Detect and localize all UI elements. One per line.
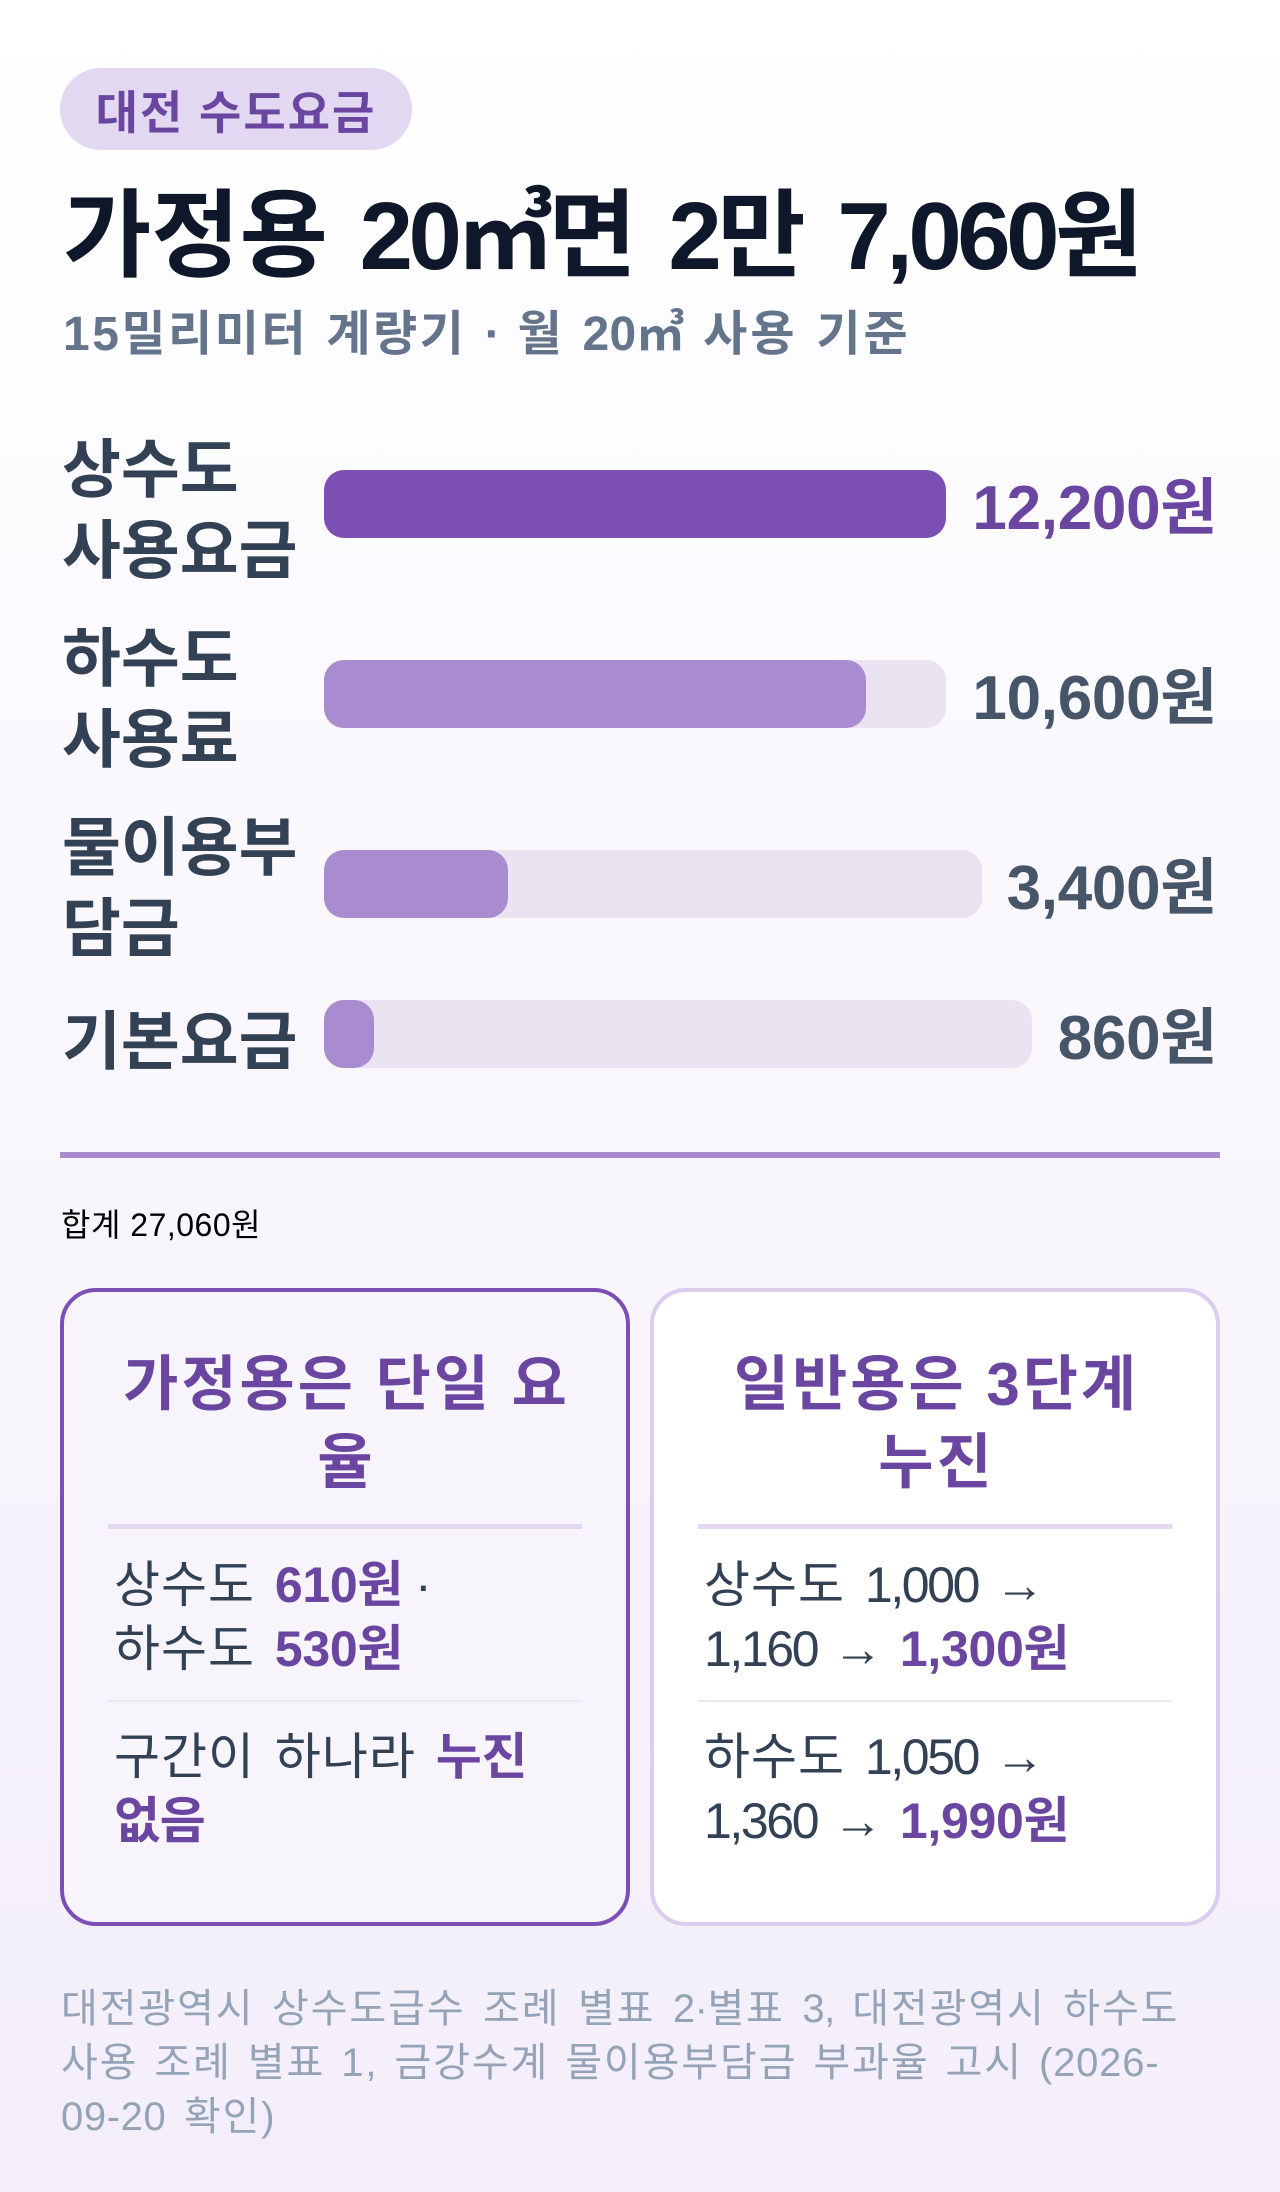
label: 담금 xyxy=(62,893,180,965)
text: sewage tiers: 1,360 → 1,990원 xyxy=(704,1793,1069,1849)
text: no progressive xyxy=(114,1729,527,1849)
text: water tiers: 상수도 1,000 → xyxy=(704,1557,1046,1613)
label: 사용료 xyxy=(62,704,239,776)
title: 가정용 20㎥면 2만 7,060원 xyxy=(63,183,1143,290)
card: household single rate xyxy=(60,1288,630,1926)
source note: 대전광역시 상수도급수 조례 별표 2·별표 3, 대전광역시 하수도 xyxy=(61,1987,1179,2031)
text: rates: 하수도 530원 xyxy=(114,1621,403,1677)
text: sewage tiers: 하수도 1,050 → xyxy=(704,1729,1046,1785)
bar: 860 xyxy=(324,1000,1032,1068)
label xyxy=(62,812,298,965)
source note: 사용 조례 별표 1, 금강수계 물이용부담금 부과율 고시 (2026- xyxy=(61,2041,1159,2085)
label: 기본요금 xyxy=(62,1006,298,1078)
bar: 3,400 xyxy=(324,850,982,918)
card heading xyxy=(734,1351,1139,1496)
row: water use charge xyxy=(62,812,1217,965)
card heading: 누진 xyxy=(878,1429,995,1496)
value: 12,200원 xyxy=(972,474,1217,543)
label xyxy=(62,434,298,587)
row: water usage fee xyxy=(62,434,1217,587)
total: 합계 27,060원 xyxy=(61,1207,261,1243)
card: general three-tier xyxy=(650,1288,1220,1926)
value: 860원 xyxy=(1058,1004,1217,1073)
source note xyxy=(61,1987,1179,2139)
pill: region tag xyxy=(60,68,412,150)
bar: 10,600 xyxy=(324,660,946,728)
row: base fee xyxy=(62,1000,1217,1078)
label: 하수도 xyxy=(62,623,239,695)
label: 사용요금 xyxy=(62,515,298,587)
label: 상수도 xyxy=(62,434,239,506)
value: 10,600원 xyxy=(972,664,1217,733)
text: no progressive: 없음 xyxy=(114,1793,205,1849)
text: water tiers xyxy=(704,1557,1069,1677)
subtitle: 15밀리미터 계량기 · 월 20㎥ 사용 기준 xyxy=(63,308,911,361)
label: 물이용부 xyxy=(62,812,298,884)
text: no progressive: 구간이 하나라 누진 xyxy=(114,1729,527,1785)
source note: 09-20 확인) xyxy=(61,2095,276,2139)
card heading: 일반용은 3단계 xyxy=(734,1351,1139,1418)
label xyxy=(62,623,239,776)
bar chart: fee breakdown xyxy=(62,434,1217,1078)
text: sewage tiers xyxy=(704,1729,1069,1849)
text: rates xyxy=(114,1557,433,1677)
value: 3,400원 xyxy=(1007,854,1217,923)
card heading: 율 xyxy=(317,1429,376,1496)
pill: region tag: 대전 수도요금 xyxy=(96,87,376,139)
card heading xyxy=(123,1351,570,1496)
text: rates: 상수도 610원 · xyxy=(114,1557,433,1613)
card heading: 가정용은 단일 요 xyxy=(123,1351,570,1418)
bar: 12,200 xyxy=(324,470,946,538)
row: sewage fee xyxy=(62,623,1217,776)
text: water tiers: 1,160 → 1,300원 xyxy=(704,1621,1069,1677)
